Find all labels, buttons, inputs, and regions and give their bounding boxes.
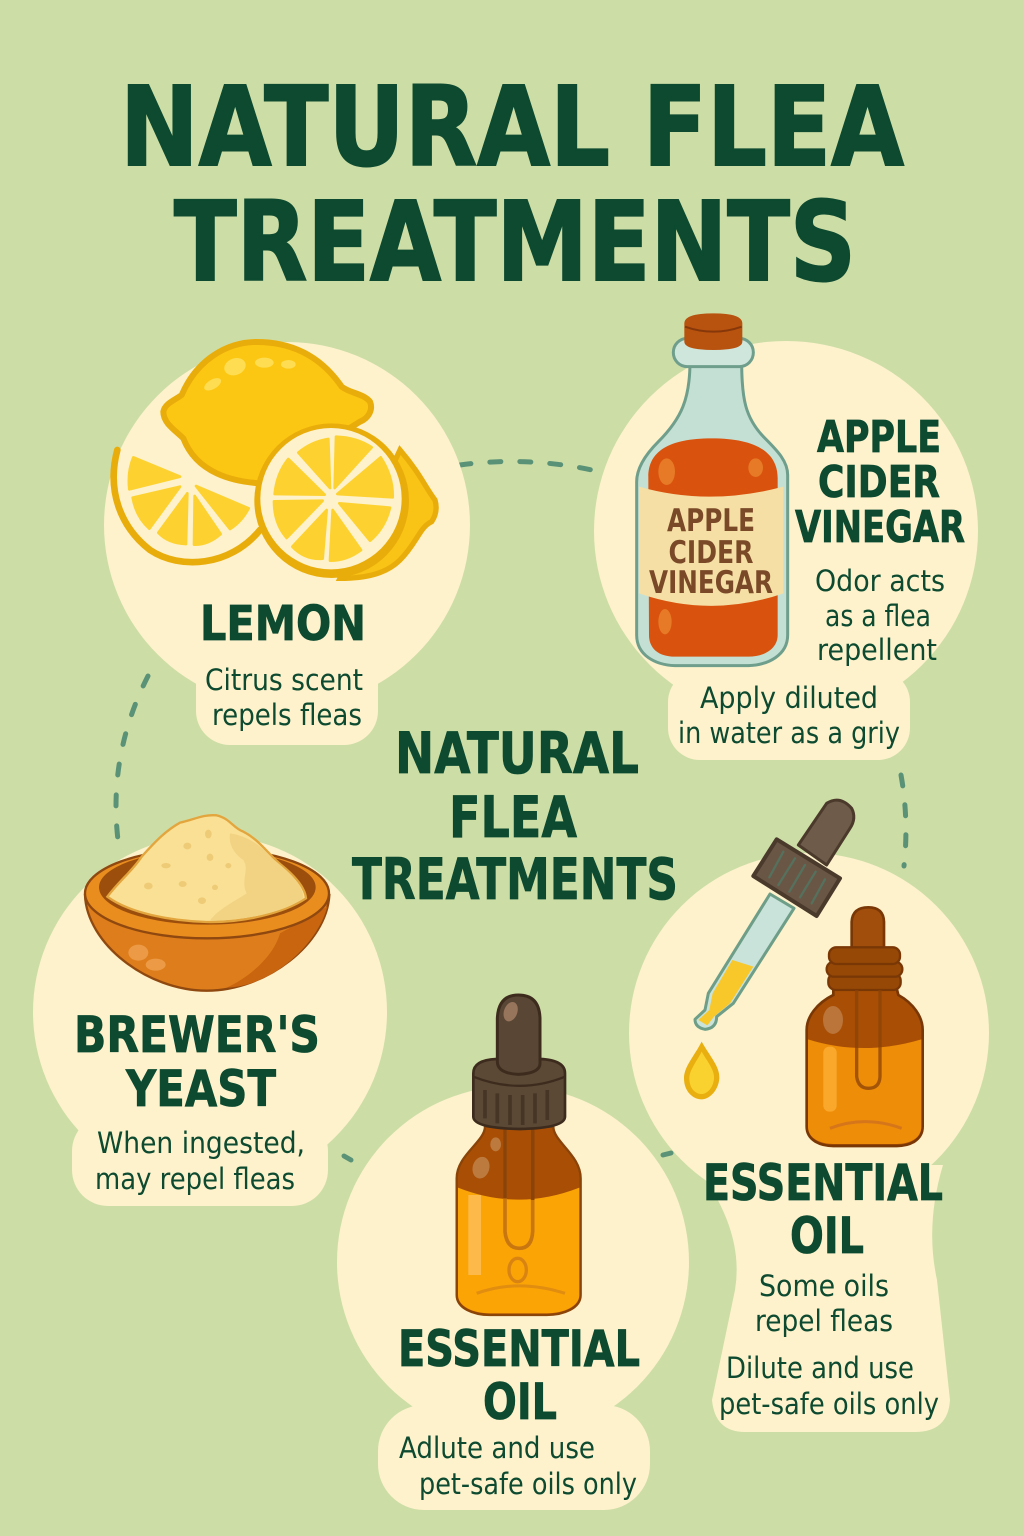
heading: apple cider vinegar: CIDER	[818, 457, 940, 508]
text: some oils	[755, 1269, 893, 1338]
title	[120, 63, 904, 306]
text: vinegar odor: Odor acts	[815, 564, 945, 598]
heading: essential oil right	[703, 1154, 943, 1265]
dashed connector: yeast to oil	[344, 1156, 351, 1160]
panel: essential oil bottom	[337, 995, 689, 1510]
heading: center title	[352, 721, 678, 913]
heading: brewer's yeast: BREWER'S	[74, 1006, 320, 1064]
text: essential oil bottom: pet-safe oils only	[419, 1467, 637, 1501]
heading: apple cider vinegar	[795, 412, 965, 553]
icon: large amber bottle	[457, 995, 581, 1315]
dashed connector: oil to oil	[663, 1153, 671, 1155]
heading: center title: TREATMENTS	[352, 847, 678, 913]
text: brewer's yeast: may repel fleas	[95, 1162, 295, 1196]
text: brewer's yeast	[95, 1126, 305, 1196]
heading: essential oil right: ESSENTIAL	[703, 1154, 943, 1212]
text: bottle label: VINEGAR	[649, 565, 773, 601]
text: dilute	[719, 1351, 939, 1421]
text: vinegar odor: as a flea	[825, 599, 931, 633]
text: brewer's yeast: When ingested,	[97, 1126, 305, 1160]
text: essential oil bottom: Adlute and use	[399, 1431, 595, 1465]
heading: apple cider vinegar: APPLE	[817, 412, 941, 463]
dashed connector: lemon to vinegar	[460, 461, 592, 470]
text: some oils: Some oils	[759, 1269, 889, 1303]
heading: brewer's yeast	[74, 1006, 320, 1118]
text: vinegar odor	[815, 564, 945, 667]
text: some oils: repel fleas	[755, 1304, 893, 1338]
panel: brewer's yeast	[33, 815, 387, 1206]
panel: apple cider vinegar	[594, 313, 978, 760]
icon: vinegar bottle	[637, 313, 788, 666]
text: lemon: Citrus scent	[205, 663, 363, 697]
dashed connector: lemon to yeast	[116, 676, 148, 840]
heading: center title: FLEA	[449, 785, 577, 851]
text: vinegar apply	[678, 681, 900, 750]
text: vinegar apply: in water as a griy	[678, 716, 900, 750]
icon: bowl of yeast	[85, 815, 329, 991]
heading: essential oil bottom: ESSENTIAL	[398, 1320, 640, 1378]
heading: essential oil bottom: OIL	[483, 1373, 557, 1431]
icon: lemons	[114, 342, 436, 578]
heading: apple cider vinegar: VINEGAR	[795, 502, 965, 553]
text: dilute: pet-safe oils only	[719, 1387, 939, 1421]
panel: essential oil right	[629, 800, 989, 1432]
text: dilute: Dilute and use	[726, 1351, 914, 1385]
text: vinegar odor: repellent	[817, 633, 937, 667]
heading: brewer's yeast: YEAST	[125, 1060, 276, 1118]
text: bottle label: CIDER	[668, 535, 754, 571]
text: essential oil bottom	[399, 1431, 637, 1501]
text: bottle label: APPLE	[667, 503, 755, 539]
heading: essential oil bottom	[398, 1320, 640, 1431]
icon: dropper	[684, 800, 854, 1099]
icon: small amber bottle	[807, 907, 923, 1146]
text: lemon	[205, 663, 363, 732]
text: bottle label	[649, 503, 773, 601]
heading: essential oil right: OIL	[790, 1207, 864, 1265]
title: NATURAL FLEA	[120, 63, 904, 191]
panel: lemon	[104, 342, 470, 745]
title: TREATMENTS	[174, 178, 856, 306]
text: vinegar apply: Apply diluted	[700, 681, 878, 715]
text: lemon: repels fleas	[212, 698, 362, 732]
dashed connector: vinegar to oil	[901, 775, 906, 866]
heading: center title: NATURAL	[395, 721, 639, 787]
heading: lemon: LEMON	[200, 596, 366, 652]
